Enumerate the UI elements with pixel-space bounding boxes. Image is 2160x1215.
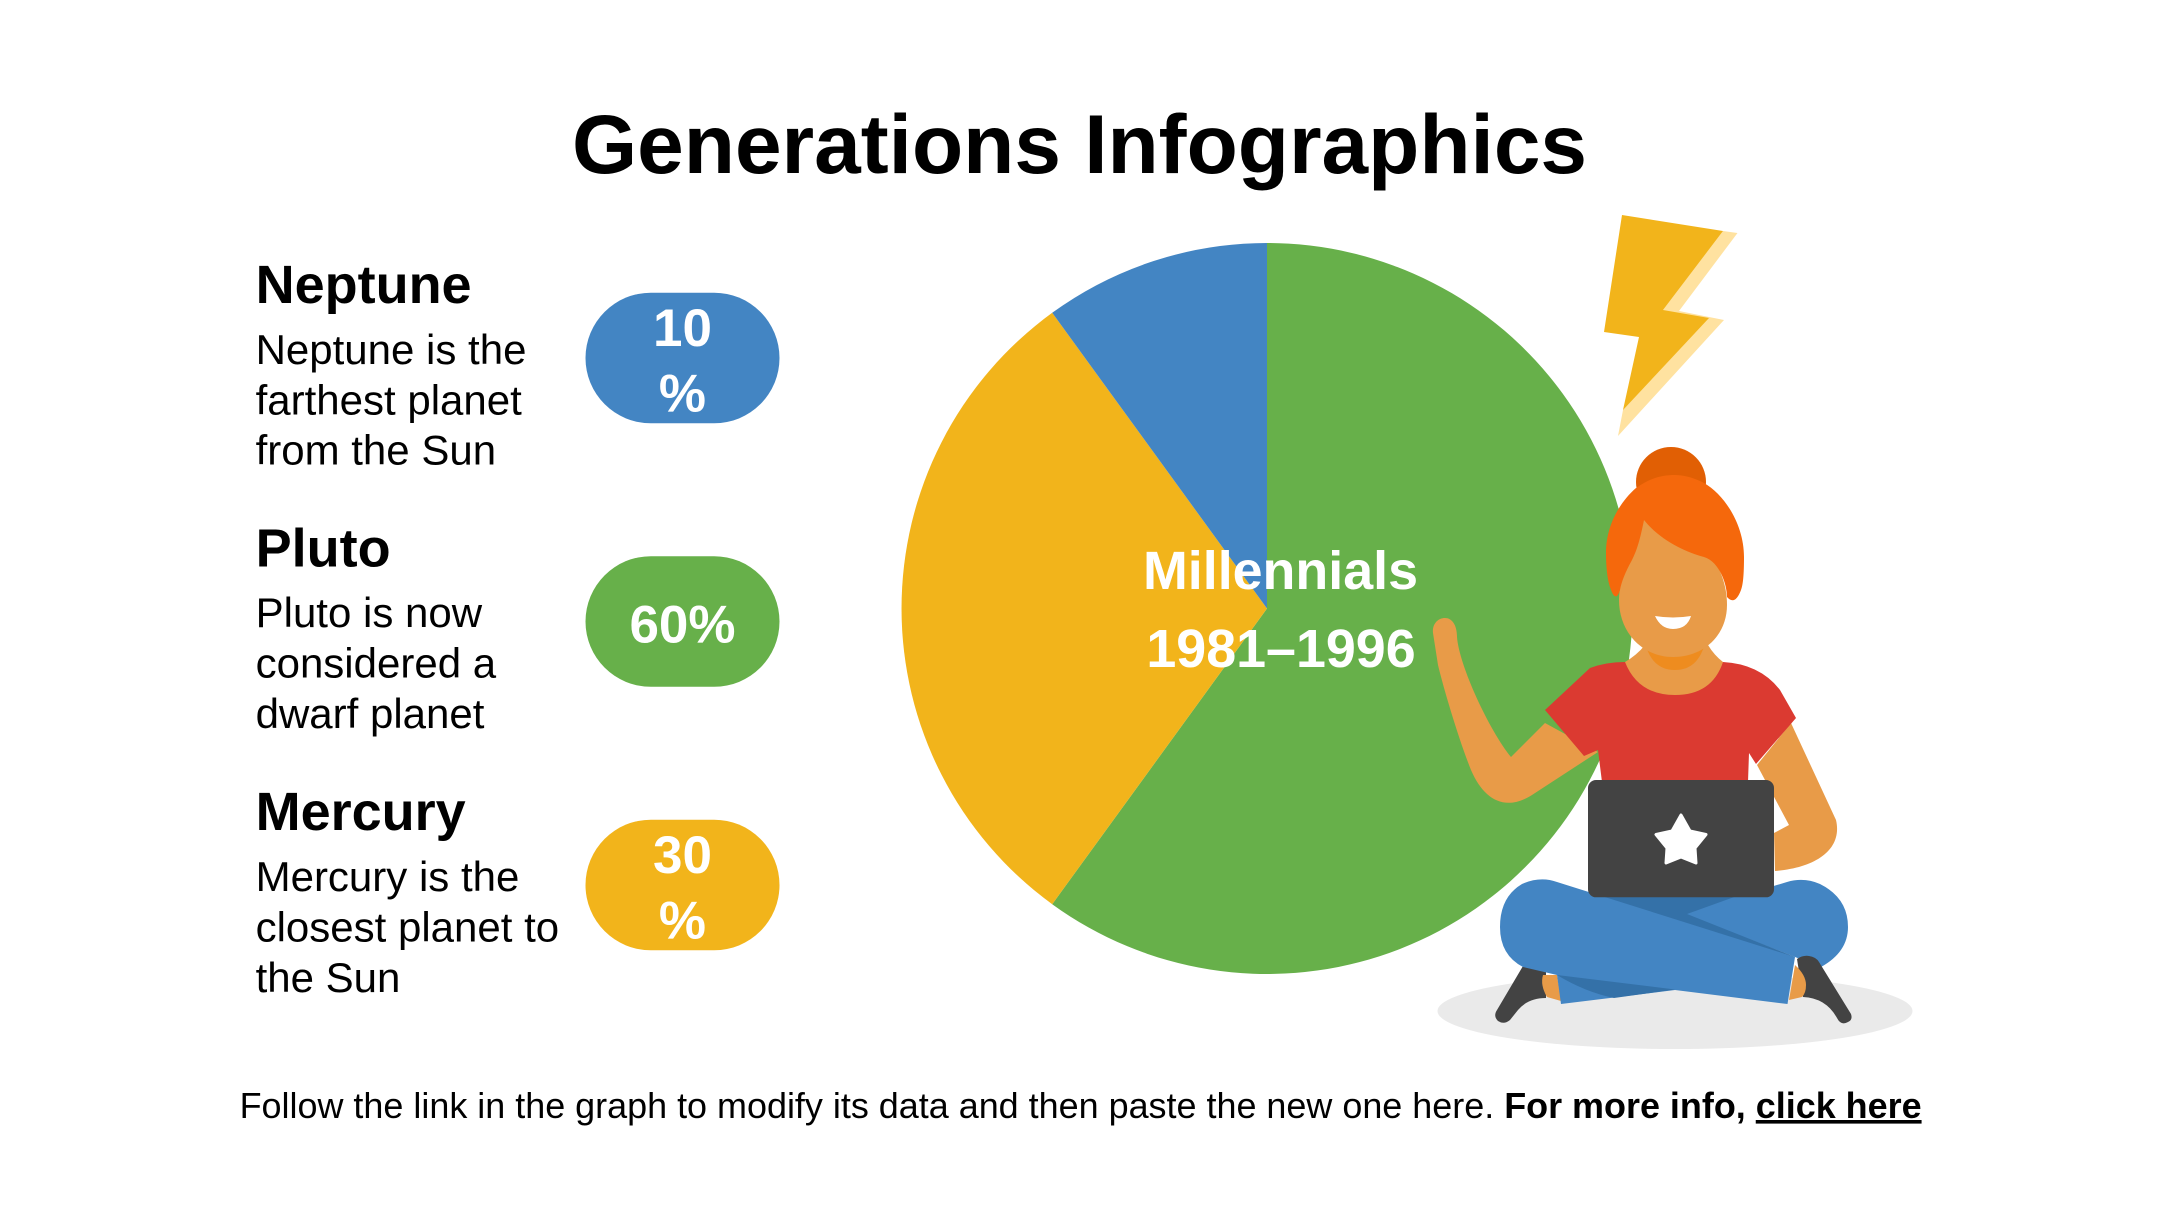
badge: 30%: %	[659, 892, 706, 950]
text: Pluto description	[256, 589, 497, 737]
ground shadow	[1438, 973, 1912, 1049]
badge: 10%	[586, 293, 780, 424]
lower leg shadow	[1557, 975, 1675, 998]
front leg	[1500, 879, 1795, 1004]
panel: Neptune	[256, 255, 780, 474]
text: Mercury description: the Sun	[256, 954, 400, 1001]
leg shadow	[1600, 896, 1795, 957]
slice: green 60%	[1052, 243, 1633, 974]
right arm	[1757, 723, 1837, 871]
illustration: woman with laptop	[1433, 447, 1912, 1049]
heading: Neptune: Neptune	[256, 255, 472, 315]
text: Mercury description	[256, 853, 559, 1001]
smile	[1655, 616, 1691, 629]
hair	[1606, 475, 1744, 600]
badge: 30%: 30	[653, 826, 712, 885]
back leg	[1613, 880, 1848, 967]
laptop	[1588, 780, 1774, 897]
pie chart	[902, 243, 1633, 974]
text: Neptune description	[256, 326, 526, 474]
text: Pluto description: Pluto is now	[256, 589, 483, 636]
title: Generations Infographics	[572, 97, 1587, 191]
panel: Pluto	[256, 518, 780, 737]
face	[1619, 515, 1727, 657]
heading: Pluto: Pluto	[256, 518, 391, 578]
text: Neptune description: from the Sun	[256, 426, 496, 474]
text: Neptune description: Neptune is the	[256, 326, 526, 373]
text: Pluto description: considered a	[256, 640, 497, 686]
slice: yellow 30%	[902, 313, 1267, 904]
pie centre label: Millennials	[1143, 541, 1418, 601]
text: Mercury description: Mercury is the	[256, 853, 519, 900]
right ankle	[1789, 965, 1806, 1000]
badge: 60%	[586, 556, 780, 687]
badge: 30%	[586, 820, 780, 950]
icon: lightning bolt	[1604, 215, 1738, 436]
slice: blue 10%	[1052, 243, 1267, 608]
text: Pluto description: dwarf planet	[256, 690, 485, 737]
badge: 60%: 60%	[629, 596, 736, 654]
icon: star	[1656, 815, 1706, 863]
text: Neptune description: farthest planet	[256, 376, 522, 423]
left shoe	[1495, 966, 1546, 1023]
left ankle	[1542, 975, 1561, 1001]
footer note: Follow the link in the graph to modify its data and then paste the new one here. For more info, click here	[240, 1085, 1922, 1126]
pie centre label	[1143, 541, 1418, 679]
t-shirt	[1545, 662, 1796, 782]
badge: 10%: %	[659, 364, 706, 424]
left arm raised	[1433, 618, 1598, 803]
badge: 10%: 10	[653, 299, 712, 358]
panel: Mercury	[256, 782, 780, 1001]
heading: Mercury: Mercury	[256, 782, 466, 842]
neck and collar	[1625, 640, 1723, 695]
pie centre label: 1981–1996	[1146, 619, 1416, 679]
text: Mercury description: closest planet to	[256, 904, 559, 950]
hair bun	[1636, 447, 1706, 517]
right shoe	[1797, 956, 1852, 1023]
neck shadow	[1645, 643, 1705, 670]
